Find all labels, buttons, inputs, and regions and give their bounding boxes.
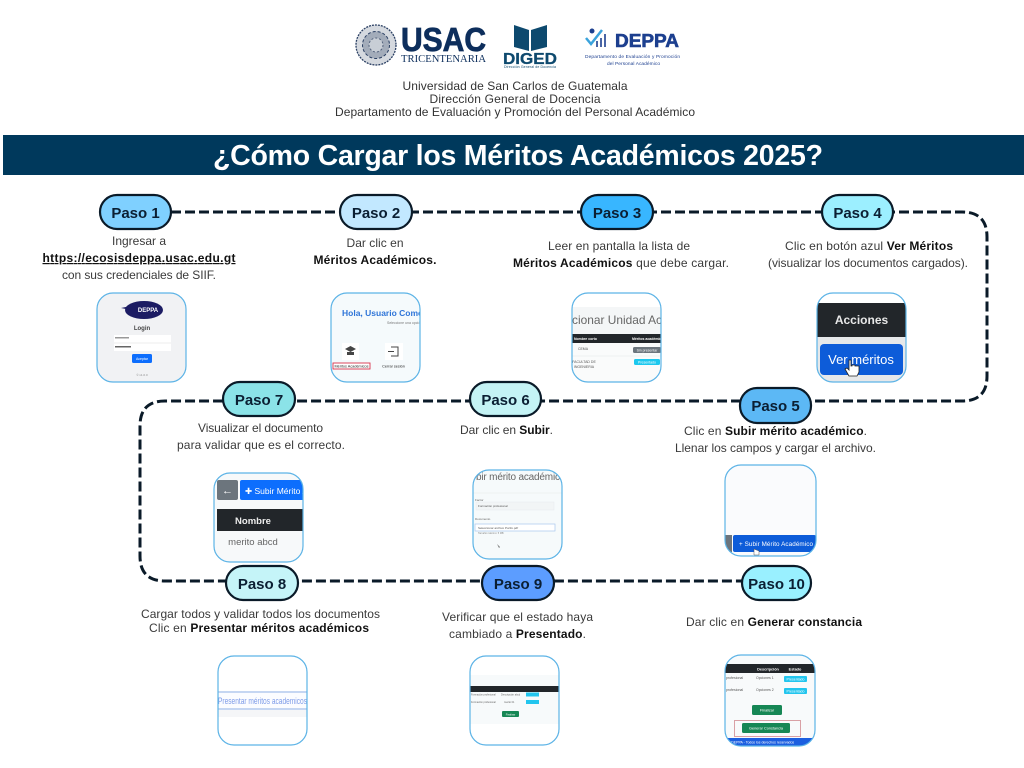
screenshot: document list: Nombre <box>235 516 271 527</box>
text: step 9 <box>442 610 593 641</box>
step 2 <box>314 195 436 382</box>
institution names <box>335 79 695 119</box>
screenshot: upload form <box>473 470 562 559</box>
screenshot: generar constancia: Estado <box>789 668 802 672</box>
screenshot: status table: Formación profesional <box>471 701 496 704</box>
screenshot: document list <box>214 473 308 562</box>
text: step 3: Leer en pantalla la lista de <box>548 239 690 253</box>
screenshot: main menu: Seleccione una opción <box>387 321 422 325</box>
screenshot: generar constancia <box>725 655 815 746</box>
logo: DEPPA: DEPPA <box>615 31 679 51</box>
screenshot: subir mérito button: + Subir Mérito Académico <box>739 541 813 548</box>
screenshot: main menu: Méritos Académicos <box>335 364 369 368</box>
institution names: Universidad de San Carlos de Guatemala <box>402 79 628 93</box>
logo: USAC <box>356 21 486 65</box>
pill: Paso 10 <box>742 566 811 600</box>
screenshot: upload form: Factor <box>475 498 484 502</box>
screenshot: generar constancia: profesional <box>726 676 743 680</box>
text: step 2: Méritos Académicos. <box>314 253 436 267</box>
pill: Paso 1 <box>100 195 171 229</box>
title banner: ¿Cómo Cargar los Méritos Académicos 2025? <box>213 140 823 172</box>
screenshot: upload form: Tamaño máximo: 5 MB <box>478 532 504 535</box>
pill: Paso 7 <box>223 382 295 416</box>
screenshot: generar constancia: Opciones 1 <box>756 676 774 680</box>
screenshot: login: © v1.0.0 <box>136 373 148 377</box>
text: step 2 <box>314 236 436 267</box>
screenshot: main menu: Cerrar sesión <box>382 364 405 368</box>
screenshot: upload form: Documento <box>475 517 491 521</box>
screenshot: presentar méritos: Presentar méritos academicos <box>218 696 307 706</box>
screenshot: upload form: Formación profesional <box>478 504 508 508</box>
text: step 9: cambiado a Presentado. <box>449 627 586 641</box>
pill: Paso 7: Paso 7 <box>235 392 283 409</box>
screenshot: generar constancia: Finalizar <box>760 708 775 712</box>
screenshot: ver méritos button <box>817 293 906 382</box>
pill: Paso 5 <box>740 388 811 423</box>
text: step 1 <box>42 234 236 282</box>
text: step 2: Dar clic en <box>346 236 404 250</box>
text: step 4 <box>768 239 968 270</box>
text: step 10: Dar clic en Generar constancia <box>686 615 862 629</box>
pill: Paso 9 <box>482 566 554 600</box>
text: step 4: (visualizar los documentos cargados). <box>768 256 968 270</box>
logo: DEPPA: Departamento de Evaluación y Promoción <box>585 54 680 60</box>
screenshot: status table: Descripción abcd <box>501 694 521 696</box>
text: step 1: con sus credenciales de SIIF. <box>62 268 216 282</box>
screenshot: unit list: CEMA <box>578 347 589 351</box>
text: step 9: Verificar que el estado haya <box>442 610 593 624</box>
screenshot: generar constancia: Opciones 2 <box>756 688 774 692</box>
pill: Paso 6: Paso 6 <box>481 392 530 409</box>
screenshot: generar constancia: Presentado <box>787 678 805 682</box>
screenshot: generar constancia: Presentado <box>787 690 805 694</box>
screenshot: login: DEPPA <box>138 308 159 314</box>
text: step 5: Llenar los campos y cargar el archivo. <box>675 441 876 455</box>
screenshot: status table: merito 01 <box>504 701 515 704</box>
step 3 <box>513 195 729 382</box>
screenshot: unit list: Sin presentar <box>637 348 658 352</box>
header logos <box>356 21 680 69</box>
pill: Paso 4 <box>822 195 893 229</box>
step 10 <box>686 566 862 746</box>
screenshot: unit list: Presentado <box>638 360 656 364</box>
text: step 8 <box>141 607 380 635</box>
text: step 8: Cargar todos y validar todos los documentos <box>141 607 380 621</box>
pill: Paso 1: Paso 1 <box>111 205 160 222</box>
screenshot: main menu: Hola, Usuario Comeval <box>342 308 435 318</box>
screenshot: login <box>97 293 186 382</box>
pill: Paso 8 <box>226 566 298 600</box>
text: step 6: Dar clic en Subir. <box>460 423 553 437</box>
pill: Paso 6 <box>470 382 541 416</box>
institution names: Dirección General de Docencia <box>430 92 601 106</box>
text: step 3: Méritos Académicos que debe cargar. <box>513 256 729 270</box>
text: step 7: para validar que es el correcto. <box>177 438 345 452</box>
step 1 <box>42 195 236 382</box>
screenshot: document list: merito abcd <box>228 537 278 548</box>
text: step 3 <box>513 239 729 270</box>
screenshot: unit list <box>572 293 666 382</box>
text: step 7 <box>177 421 345 452</box>
logo: USAC: USAC <box>401 21 486 58</box>
text: step 7: Visualizar el documento <box>198 421 323 435</box>
screenshot: unit list: Nombre corto <box>574 337 597 341</box>
pill: Paso 3 <box>581 195 653 229</box>
screenshot: status table <box>470 656 559 745</box>
dashed connector path <box>140 212 987 581</box>
logo: DIGED <box>503 25 557 69</box>
step 4 <box>768 195 968 382</box>
step 5 <box>675 388 876 556</box>
pill: Paso 8: Paso 8 <box>238 576 286 593</box>
screenshot: status table: Formación profesional <box>471 694 496 696</box>
screenshot: generar constancia: profesional <box>726 688 743 692</box>
screenshot: unit list: INGENIERIA <box>574 365 595 369</box>
screenshot: generar constancia: Descripción <box>757 668 780 672</box>
screenshot: unit list: FACULTAD DE <box>572 360 596 364</box>
text: step 5 <box>675 424 876 455</box>
screenshot: login: Aceptar <box>136 357 149 361</box>
screenshot: document list: ✚ Subir Mérito A <box>245 486 308 496</box>
pill: Paso 9: Paso 9 <box>494 576 542 593</box>
step 8 <box>141 566 380 745</box>
pill: Paso 3: Paso 3 <box>593 205 641 222</box>
logo: USAC: TRICENTENARIA <box>401 54 486 65</box>
pill: Paso 10: Paso 10 <box>748 576 805 593</box>
text: step 8: Clic en Presentar méritos académicos <box>149 621 369 635</box>
text: step 1: https://ecosisdeppa.usac.edu.gt <box>42 251 236 265</box>
screenshot: generar constancia: LE DEPPA - Todos los derechos reservados <box>726 740 794 744</box>
institution names: Departamento de Evaluación y Promoción del Personal Académico <box>335 105 695 119</box>
screenshot: ver méritos button: Ver méritos <box>828 352 894 367</box>
screenshot: status table: Finalizar <box>506 714 515 716</box>
screenshot: upload form: bir mérito académic <box>476 472 560 483</box>
pill: Paso 2: Paso 2 <box>352 205 400 222</box>
pill: Paso 5: Paso 5 <box>751 398 800 415</box>
screenshot: upload form: Seleccionar archivo Portfo.pdf <box>478 526 518 530</box>
pill: Paso 2 <box>340 195 412 229</box>
screenshot: document list: ← <box>222 485 233 497</box>
screenshot: subir mérito button <box>725 465 816 556</box>
title banner <box>3 135 1024 175</box>
text: step 5: Clic en Subir mérito académico. <box>684 424 867 438</box>
screenshot: unit list: cionar Unidad Ac <box>572 313 662 327</box>
screenshot: generar constancia: Generar Constancia <box>749 726 784 730</box>
logo: DIGED: DIGED <box>503 51 557 68</box>
text: step 1: Ingresar a <box>112 234 166 248</box>
screenshot: unit list: Méritos académicos <box>632 337 666 341</box>
text: step 4: Clic en botón azul Ver Méritos <box>785 239 953 253</box>
logo: DIGED: Dirección General de Docencia <box>504 65 556 69</box>
screenshot: presentar méritos <box>218 656 307 745</box>
logo: DEPPA <box>585 28 680 67</box>
step 7 <box>177 382 345 562</box>
logo: DEPPA: del Personal Académico <box>607 61 660 67</box>
step 6 <box>460 382 562 559</box>
screenshot: login: Login <box>134 326 150 332</box>
step 9 <box>442 566 593 745</box>
pill: Paso 4: Paso 4 <box>833 205 882 222</box>
screenshot: ver méritos button: Acciones <box>835 313 889 327</box>
screenshot: main menu <box>330 292 421 383</box>
